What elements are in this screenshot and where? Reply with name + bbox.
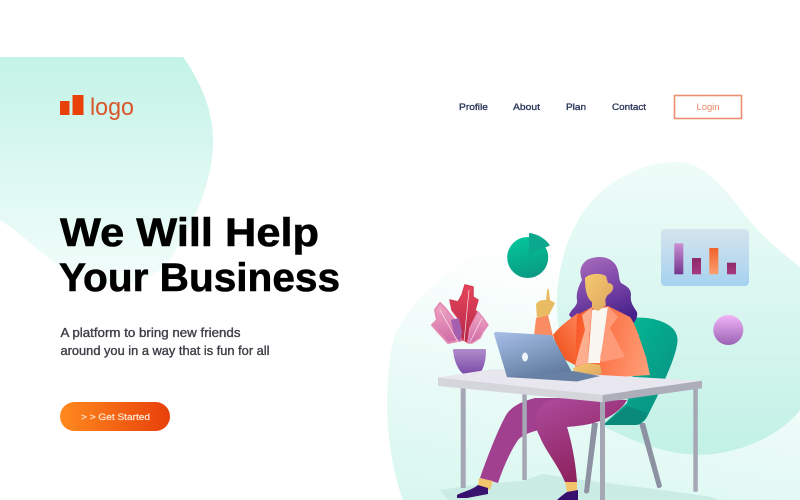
woman xyxy=(457,274,650,500)
navigation xyxy=(459,102,646,113)
login button xyxy=(674,96,742,118)
jacket arm xyxy=(553,313,585,365)
background blob: inner right xyxy=(557,162,800,455)
red leaf xyxy=(450,285,478,342)
title: We Will Help xyxy=(60,211,319,255)
login button: Login xyxy=(696,102,720,113)
chair seat xyxy=(603,406,648,425)
right lapel xyxy=(600,306,625,362)
desk legs xyxy=(461,386,466,488)
chair legs xyxy=(584,423,598,494)
logo wordmark: logo xyxy=(90,94,134,121)
shirt xyxy=(588,307,608,363)
back foot xyxy=(457,478,493,498)
get started button xyxy=(60,402,170,431)
back leg xyxy=(480,398,560,483)
icon: pie chart xyxy=(507,233,550,278)
subtitle text: A platform to bring new friends xyxy=(60,326,240,340)
background blob: outer pale right xyxy=(387,170,800,500)
title xyxy=(59,211,340,300)
plant xyxy=(432,285,488,375)
front leg xyxy=(535,398,627,482)
raised hand xyxy=(536,289,555,318)
neck and face xyxy=(585,274,613,311)
floor shadow xyxy=(440,474,718,500)
desk xyxy=(438,369,702,500)
get started button: > > Get Started xyxy=(81,412,150,423)
title: Your Business xyxy=(59,256,340,300)
resting hand xyxy=(573,363,602,377)
pot xyxy=(453,349,486,375)
logo icon xyxy=(60,95,84,115)
laptop logo xyxy=(522,352,528,362)
logo xyxy=(60,94,134,121)
nav: Contact: Contact xyxy=(612,102,646,113)
background blob: top left xyxy=(0,57,213,284)
chair xyxy=(584,318,678,494)
bar chart panel xyxy=(661,229,749,286)
jacket xyxy=(575,306,650,378)
front foot xyxy=(557,482,578,500)
nav: About: About xyxy=(513,102,540,113)
left lapel xyxy=(575,307,592,367)
purple small leaf xyxy=(451,318,462,342)
chair back xyxy=(603,318,678,425)
nav: Plan: Plan xyxy=(566,102,586,113)
leaf veins xyxy=(440,290,482,342)
raised forearm xyxy=(534,315,557,360)
pink leaf left xyxy=(432,303,463,343)
laptop xyxy=(494,332,600,382)
hair xyxy=(569,257,637,324)
subtitle text xyxy=(60,326,270,358)
nav: Profile: Profile xyxy=(459,102,488,113)
icon: purple ball xyxy=(713,315,743,345)
desk top xyxy=(438,369,702,395)
pink leaf right xyxy=(468,312,488,343)
subtitle text: around you in a way that is fun for all xyxy=(60,344,270,358)
